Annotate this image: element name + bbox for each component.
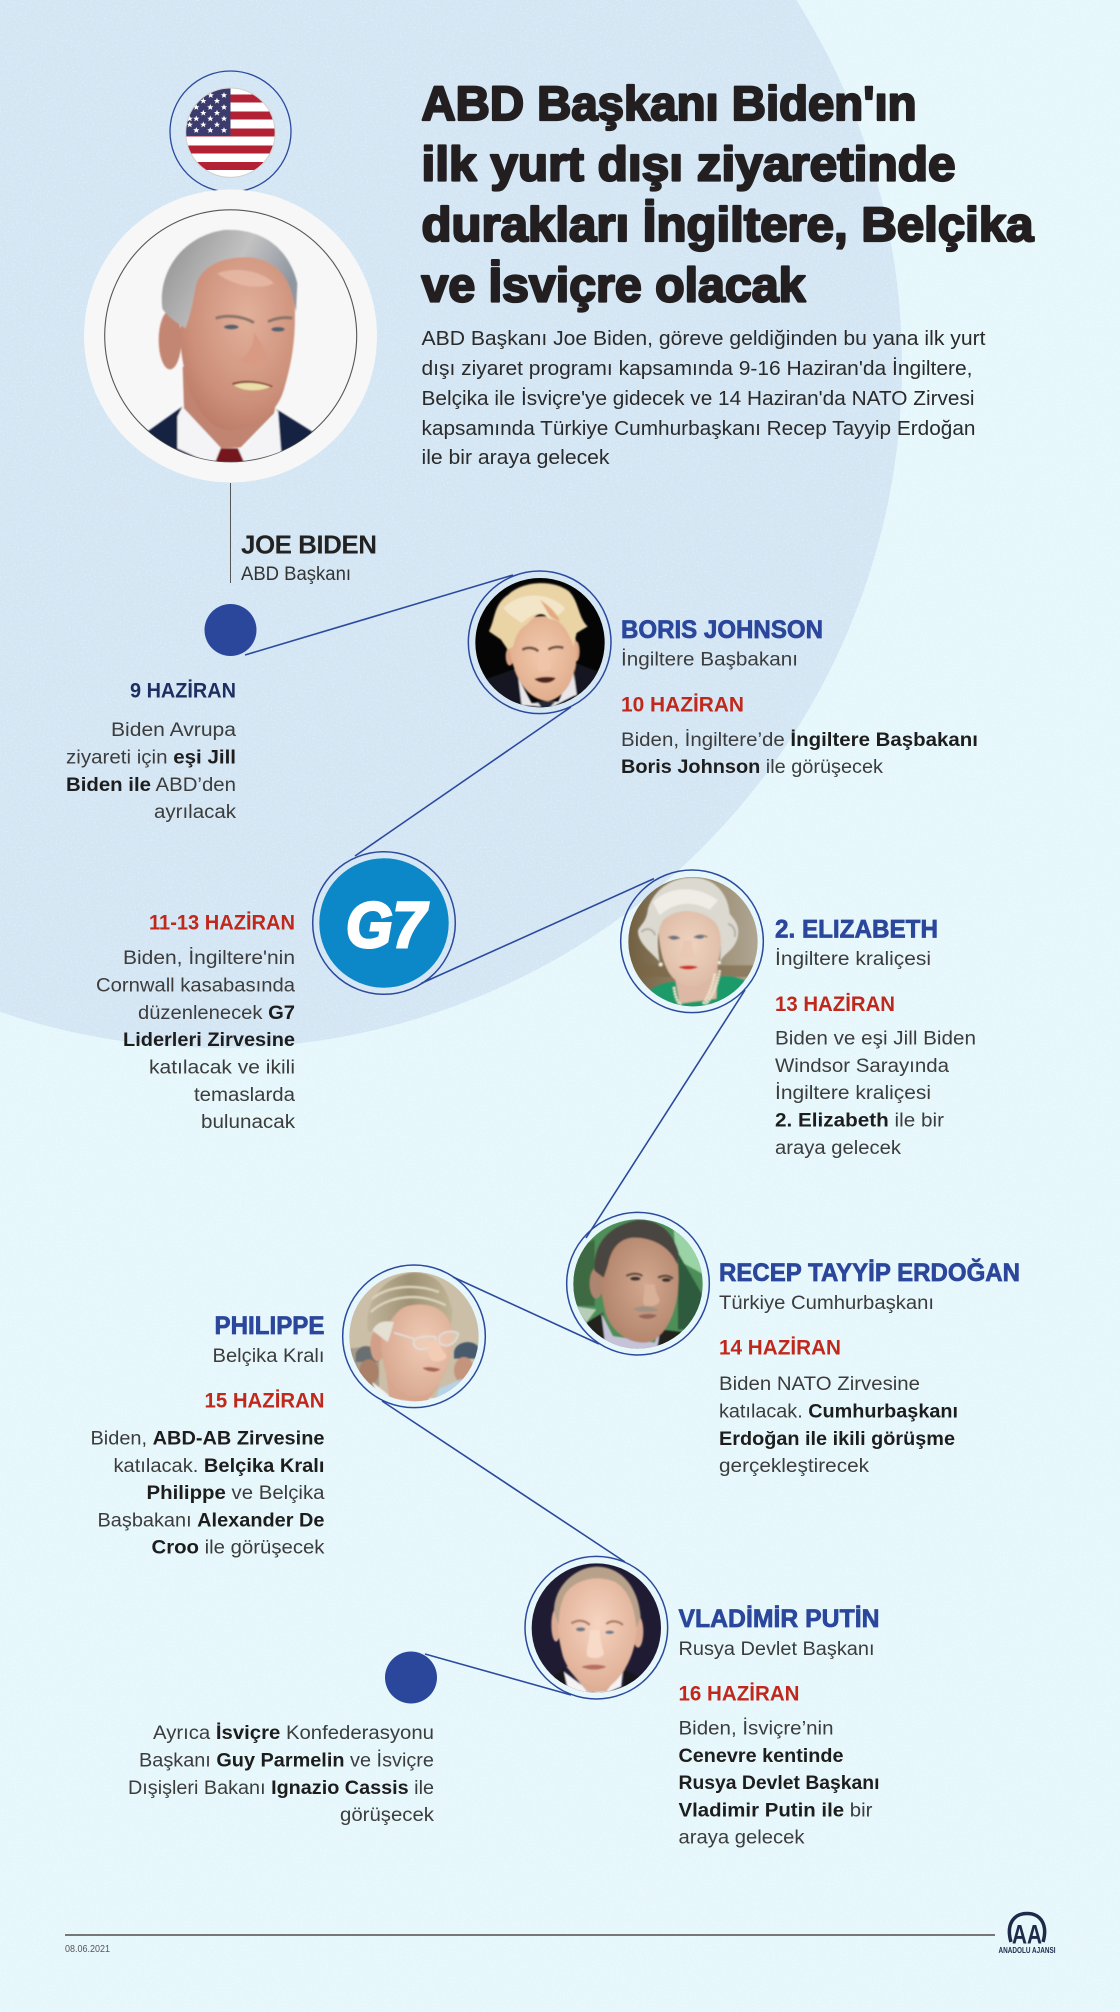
- date and description: 10 HAZİRAN: [621, 694, 744, 716]
- panel: 9 Haziran: ayrılacak: [154, 802, 237, 823]
- date and description: Başbakanı Alexander De: [98, 1510, 324, 1532]
- date and description: Biden, İngiltere’de İngiltere Başbakanı: [621, 730, 978, 751]
- name and role: İngiltere kraliçesi: [775, 949, 931, 970]
- panel: Joe Biden label: [241, 530, 377, 585]
- date and description: düzenlenecek G7: [138, 1003, 295, 1024]
- panel: Recep Tayyip Erdoğan: [563, 1209, 1020, 1477]
- date and description: 2. Elizabeth ile bir: [775, 1110, 945, 1132]
- icon: US flag: [170, 71, 291, 192]
- date and description: Biden, İsviçre’nin: [678, 1718, 834, 1740]
- intro text: ile bir araya gelecek: [422, 447, 611, 469]
- date and description: 16 HAZİRAN: [678, 1682, 800, 1706]
- icon: Anadolu Ajansı logo: [998, 1914, 1056, 1955]
- end dot: [385, 1652, 437, 1704]
- name and role: [212, 1312, 324, 1367]
- date and description: Croo ile görüşecek: [152, 1538, 325, 1558]
- portrait: Recep Tayyip Erdoğan: [563, 1209, 713, 1359]
- name and role: RECEP TAYYİP ERDOĞAN: [719, 1258, 1020, 1287]
- panel: Switzerland note: Başkanı Guy Parmelin ve İsviçre: [139, 1750, 434, 1772]
- date and description: Liderleri Zirvesine: [123, 1030, 295, 1051]
- date and description: [90, 1390, 325, 1558]
- panel: Switzerland note: Dışişleri Bakanı Ignazio Cassis ile: [128, 1778, 434, 1799]
- date and description: gerçekleştirecek: [719, 1456, 870, 1477]
- intro text: [422, 328, 986, 469]
- date and description: bulunacak: [201, 1112, 296, 1133]
- name and role: PHILIPPE: [214, 1312, 324, 1340]
- panel: Joe Biden label: ABD Başkanı: [241, 564, 351, 585]
- date and description: [678, 1682, 880, 1848]
- title: ilk yurt dışı ziyaretinde: [422, 138, 956, 192]
- intro text: kapsamında Türkiye Cumhurbaşkanı Recep Tayyip Erdoğan: [422, 418, 976, 440]
- panel: Switzerland note: [128, 1723, 435, 1826]
- connecting timeline lines: [230, 483, 745, 1695]
- title: ABD Başkanı Biden'ın: [422, 78, 916, 131]
- panel: 2. Elizabeth: [618, 867, 976, 1159]
- icon: G7 badge: G7: [346, 889, 429, 961]
- panel: Joe Biden label: JOE BIDEN: [241, 530, 377, 560]
- intro text: dışı ziyaret programı kapsamında 9-16 Haziran'da İngiltere,: [422, 357, 972, 380]
- date and description: araya gelecek: [678, 1828, 805, 1848]
- date and description: Cornwall kasabasında: [96, 976, 295, 996]
- date and description: Rusya Devlet Başkanı: [678, 1773, 880, 1794]
- intro text: ABD Başkanı Joe Biden, göreve geldiğinden bu yana ilk yurt: [422, 328, 986, 350]
- date and description: [719, 1336, 958, 1477]
- date and description: 14 HAZİRAN: [719, 1336, 841, 1360]
- footer rule: [65, 1934, 995, 1936]
- name and role: [719, 1258, 1020, 1314]
- icon: Anadolu Ajansı logo: ANADOLU AJANSI: [998, 1945, 1056, 1955]
- panel: Boris Johnson: [465, 568, 978, 778]
- date and description: İngiltere kraliçesi: [775, 1083, 931, 1104]
- panel: Switzerland note: görüşecek: [340, 1805, 435, 1826]
- date and description: Windsor Sarayında: [775, 1056, 949, 1077]
- date and description: Biden NATO Zirvesine: [719, 1374, 920, 1395]
- date and description: katılacak. Belçika Kralı: [114, 1456, 324, 1477]
- portrait: Vladimir Putin: [521, 1553, 671, 1703]
- date and description: katılacak. Cumhurbaşkanı: [719, 1402, 958, 1422]
- date and description: Biden, İngiltere'nin: [123, 948, 295, 969]
- date and description: Cenevre kentinde: [678, 1746, 844, 1767]
- date and description: Vladimir Putin ile bir: [678, 1800, 873, 1822]
- icon: Anadolu Ajansı logo: AA: [1012, 1920, 1042, 1950]
- name and role: VLADİMİR PUTİN: [678, 1605, 880, 1633]
- name and role: Rusya Devlet Başkanı: [678, 1639, 874, 1660]
- panel: Vladimir Putin: [521, 1553, 880, 1848]
- date and description: 11-13 HAZİRAN: [149, 912, 295, 934]
- panel: Switzerland note: Ayrıca İsviçre Konfederasyonu: [153, 1723, 434, 1744]
- date and description: temaslarda: [194, 1085, 295, 1106]
- name and role: [775, 916, 938, 970]
- panel: 9 Haziran: [66, 680, 237, 823]
- title: durakları İngiltere, Belçika: [422, 199, 1034, 252]
- name and role: Türkiye Cumhurbaşkanı: [719, 1293, 934, 1314]
- date and description: Erdoğan ile ikili görüşme: [719, 1429, 955, 1450]
- panel: G7: [96, 852, 455, 1133]
- panel: 9 Haziran: Biden Avrupa: [111, 720, 236, 741]
- date and description: 13 HAZİRAN: [775, 993, 895, 1016]
- panel: Philippe: [90, 1262, 489, 1558]
- intro text: Belçika ile İsviçre'ye gidecek ve 14 Haziran'da NATO Zirvesi: [422, 387, 974, 410]
- date and description: [775, 993, 976, 1159]
- date and description: Boris Johnson ile görüşecek: [621, 757, 884, 778]
- date and description: araya gelecek: [775, 1138, 902, 1159]
- date and description: Biden ve eşi Jill Biden: [775, 1028, 976, 1050]
- title: [422, 78, 1034, 312]
- panel: Joe Biden portrait: [84, 190, 377, 482]
- date and description: 15 HAZİRAN: [204, 1390, 324, 1412]
- date and description: katılacak ve ikili: [149, 1058, 295, 1078]
- name and role: 2. ELIZABETH: [775, 916, 938, 944]
- icon: G7 badge: [313, 852, 455, 994]
- name and role: [621, 616, 823, 670]
- date and description: Biden, ABD-AB Zirvesine: [90, 1428, 324, 1450]
- portrait: Philippe: [339, 1262, 489, 1412]
- date and description: Philippe ve Belçika: [146, 1483, 325, 1504]
- portrait: Boris Johnson: [465, 568, 615, 718]
- name and role: BORIS JOHNSON: [621, 616, 823, 644]
- start dot: [204, 604, 256, 656]
- large background circle: [0, 0, 902, 1048]
- name and role: İngiltere Başbakanı: [621, 650, 798, 670]
- date stamp: 08.06.2021: [65, 1944, 110, 1955]
- portrait: 2. Elizabeth: [618, 867, 768, 1017]
- name and role: Belçika Kralı: [212, 1346, 324, 1367]
- date and description: [96, 912, 296, 1133]
- panel: 9 Haziran: ziyareti için eşi Jill: [66, 748, 236, 768]
- panel: 9 Haziran: 9 HAZİRAN: [130, 680, 236, 702]
- panel: 9 Haziran: Biden ile ABD’den: [66, 775, 236, 796]
- title: ve İsviçre olacak: [422, 260, 806, 312]
- name and role: [678, 1605, 880, 1660]
- date and description: [621, 694, 978, 778]
